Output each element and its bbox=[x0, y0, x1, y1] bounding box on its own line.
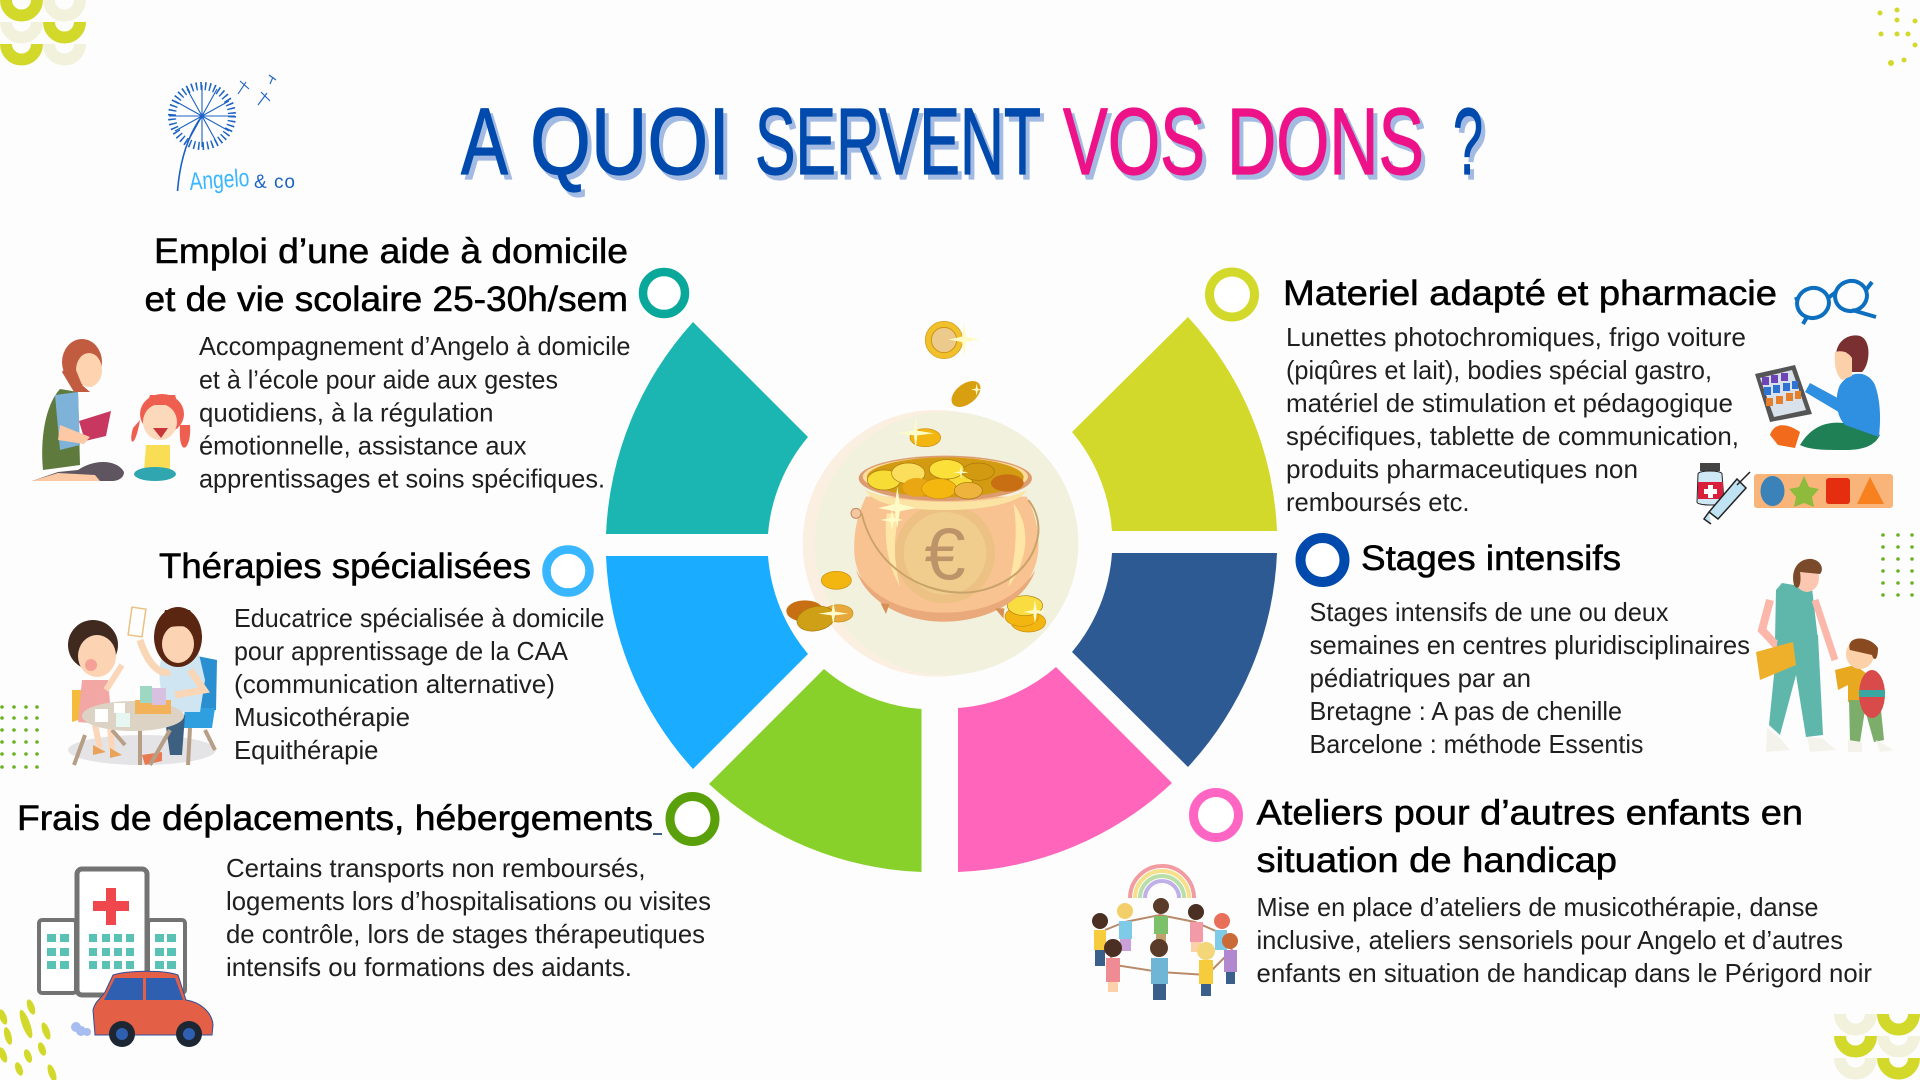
text block: Educatrice spécialisée à domicile bbox=[234, 603, 604, 633]
icon: nurse and child bbox=[1756, 559, 1894, 752]
text block: inclusive, ateliers sensoriels pour Angelo et d’autres bbox=[1256, 925, 1843, 955]
title word: A: A bbox=[461, 89, 508, 195]
pot body bbox=[854, 497, 1038, 622]
decoration: left green dots bbox=[0, 705, 39, 769]
segment: teal bbox=[606, 322, 808, 534]
ring marker bbox=[1300, 538, 1344, 582]
title word: VOS: VOS bbox=[1063, 89, 1205, 195]
backdrop circle: cream bbox=[815, 412, 1078, 675]
text block: Bretagne : A pas de chenille bbox=[1310, 696, 1622, 726]
text block: remboursés etc. bbox=[1286, 487, 1470, 517]
panel: stages intensifs bbox=[1300, 538, 1894, 759]
title word: QUOI: QUOI bbox=[530, 89, 730, 195]
pot rim and gold coins bbox=[859, 456, 1032, 501]
text block: apprentissages et soins spécifiques. bbox=[199, 464, 605, 494]
heading bbox=[1256, 794, 1803, 880]
heading: Materiel adapté et pharmacie bbox=[1283, 274, 1777, 313]
heading: situation de handicap bbox=[1256, 841, 1617, 880]
pot feet bbox=[881, 603, 1004, 618]
backdrop circle: peach bbox=[803, 410, 1069, 677]
sparkles bbox=[818, 322, 1047, 625]
decoration: top-left arcs bbox=[6, 0, 80, 60]
text block: intensifs ou formations des aidants. bbox=[226, 952, 632, 982]
ring marker bbox=[1194, 792, 1238, 838]
pot medallion with euro sign bbox=[895, 503, 995, 603]
title word: SERVENT: SERVENT bbox=[755, 89, 1041, 195]
text block: Lunettes photochromiques, frigo voiture bbox=[1286, 322, 1746, 352]
icon: children in a circle with rainbow bbox=[1092, 866, 1238, 1000]
icon: dandelion bbox=[169, 75, 276, 191]
text block bbox=[226, 853, 711, 982]
logo word: & co: & co bbox=[254, 172, 295, 193]
logo word: Angelo: Angelo bbox=[188, 164, 250, 196]
text block: pédiatriques par an bbox=[1310, 663, 1531, 693]
icon: educator and child at table bbox=[68, 607, 217, 765]
heading: Stages intensifs bbox=[1361, 539, 1621, 578]
panel: ateliers bbox=[1092, 792, 1872, 1000]
heading: Frais de déplacements, hébergements bbox=[17, 799, 653, 838]
text block: semaines en centres pluridisciplinaires bbox=[1310, 630, 1750, 660]
text block: (communication alternative) bbox=[234, 669, 555, 699]
donut chart bbox=[606, 317, 1277, 872]
text block: (piqûres et lait), bodies spécial gastro, bbox=[1286, 355, 1712, 385]
segment: light blue bbox=[606, 556, 808, 769]
text block: pour apprentissage de la CAA bbox=[234, 636, 569, 666]
panel: aide à domicile bbox=[32, 232, 685, 494]
ring marker bbox=[546, 550, 590, 592]
decoration: right green dots bbox=[1881, 533, 1914, 597]
icon: boy with tablet bbox=[1755, 335, 1880, 450]
segment: pink bbox=[958, 667, 1172, 872]
centre: pot of gold: € bbox=[924, 513, 966, 595]
panel: déplacements bbox=[17, 796, 715, 1047]
icon: medicine bottle and syringe bbox=[1697, 463, 1750, 524]
text block: Mise en place d’ateliers de musicothérapie, danse bbox=[1256, 892, 1818, 922]
text block: Stages intensifs de une ou deux bbox=[1310, 597, 1668, 627]
title word: ?: ? bbox=[1453, 89, 1483, 195]
text block: produits pharmaceutiques non bbox=[1286, 454, 1638, 484]
text block: Musicothérapie bbox=[234, 702, 410, 732]
text block bbox=[1310, 597, 1750, 759]
heading: Ateliers pour d’autres enfants en bbox=[1256, 794, 1803, 832]
text block: enfants en situation de handicap dans le Périgord noir bbox=[1256, 958, 1872, 988]
panel: thérapies bbox=[68, 547, 604, 765]
ring marker bbox=[670, 796, 715, 842]
falling coins bbox=[786, 321, 1046, 634]
text block: Barcelone : méthode Essentis bbox=[1310, 729, 1644, 759]
text block: émotionnelle, assistance aux bbox=[199, 430, 526, 460]
heading: et de vie scolaire 25-30h/sem bbox=[144, 280, 628, 319]
pot handle bbox=[862, 500, 1038, 593]
icon: shape toy bbox=[1754, 474, 1893, 508]
logo: Angelo & co bbox=[169, 75, 295, 196]
text block bbox=[199, 331, 630, 494]
heading: Emploi d’une aide à domicile bbox=[154, 232, 628, 271]
title bbox=[461, 89, 1483, 195]
underscore mark bbox=[653, 833, 662, 835]
heading bbox=[144, 232, 628, 319]
icon: glasses bbox=[1794, 277, 1876, 324]
text block: et à l’école pour aide aux gestes bbox=[199, 364, 558, 394]
ring marker bbox=[1210, 272, 1254, 317]
text block: Certains transports non remboursés, bbox=[226, 853, 646, 883]
text block bbox=[1286, 322, 1746, 517]
text block bbox=[1256, 892, 1872, 988]
text block bbox=[234, 603, 604, 765]
decoration: bottom-left slashes bbox=[0, 998, 58, 1080]
decoration: top-right dots bbox=[1878, 8, 1918, 66]
segment: lime bbox=[1072, 317, 1277, 531]
panel: matériel bbox=[1210, 272, 1893, 524]
ring marker bbox=[643, 272, 685, 314]
heading: Thérapies spécialisées bbox=[159, 547, 531, 586]
icon: red car bbox=[71, 971, 213, 1047]
title word: DONS: DONS bbox=[1227, 89, 1424, 195]
text block: de contrôle, lors de stages thérapeutiques bbox=[226, 919, 705, 949]
segment: green bbox=[709, 669, 922, 872]
text block: matériel de stimulation et pédagogique bbox=[1286, 388, 1733, 418]
text block: quotidiens, à la régulation bbox=[199, 398, 494, 428]
text block: logements lors d’hospitalisations ou visites bbox=[226, 886, 711, 916]
text block: Accompagnement d’Angelo à domicile bbox=[199, 331, 630, 361]
text block: Equithérapie bbox=[234, 735, 378, 765]
text block: spécifiques, tablette de communication, bbox=[1286, 421, 1739, 451]
decoration: bottom-right arcs bbox=[1840, 1014, 1914, 1074]
segment: navy bbox=[1072, 553, 1277, 767]
icon: hospital bbox=[39, 869, 185, 995]
centre: pot of gold bbox=[786, 321, 1078, 677]
icon: woman reading with girl bbox=[32, 339, 190, 481]
